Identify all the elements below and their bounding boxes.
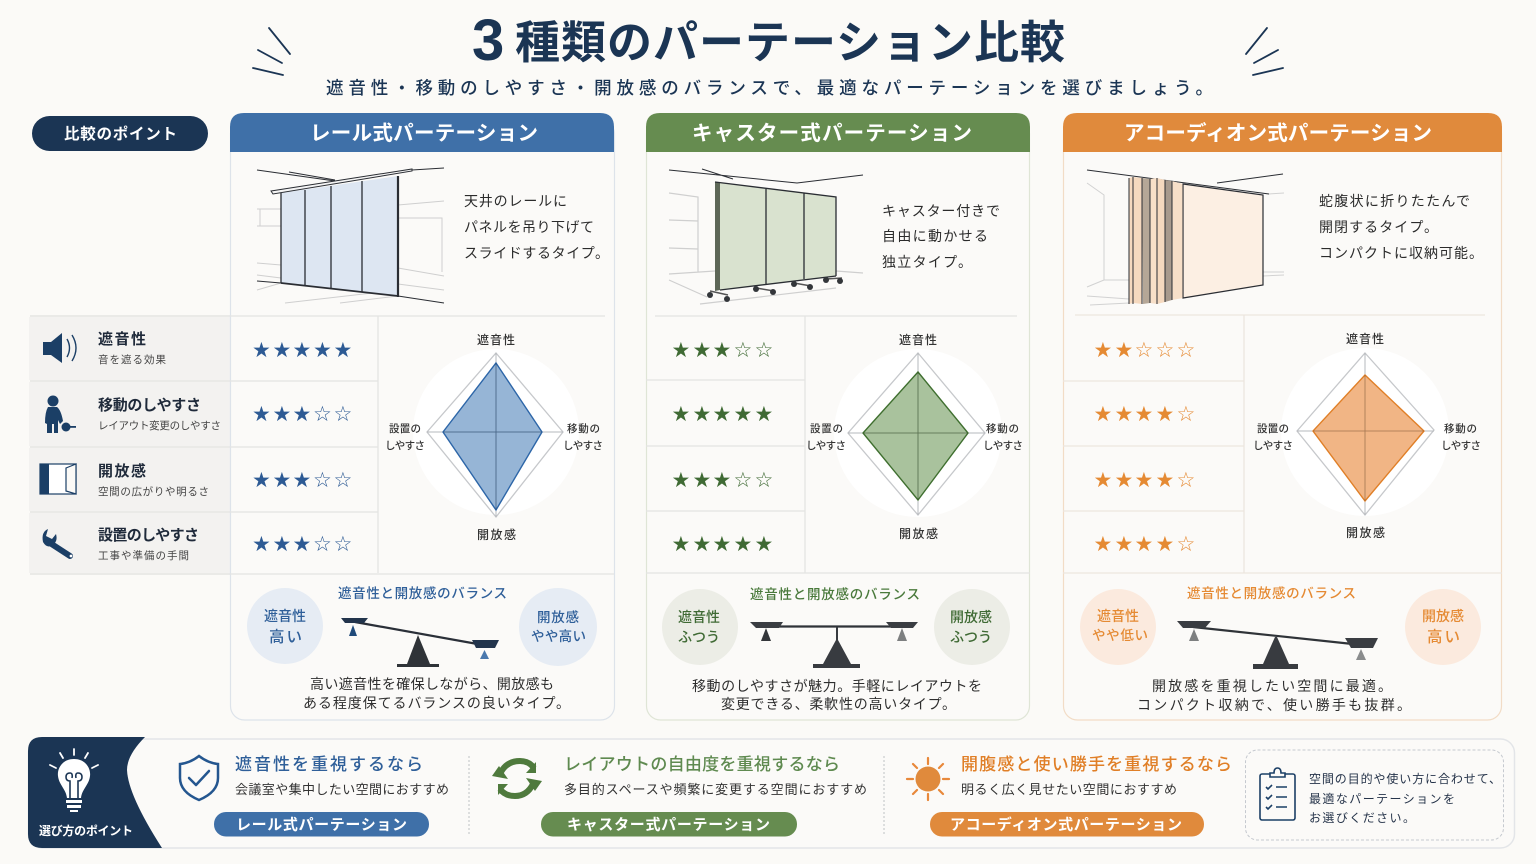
header: caster type (646, 113, 1030, 152)
text: accordion summary: コンパクト収納で、使い勝手も抜群。 (1137, 697, 1411, 713)
recommendation: openness and usability: 明るく広く見せたい空間におすすめ (961, 782, 1177, 797)
text: rail description (464, 193, 609, 261)
text: caster description: 自由に動かせる (882, 228, 988, 244)
icon: open door (40, 464, 76, 494)
stars: caster ratings: ★★★☆☆ (672, 468, 773, 492)
stars: caster ratings: ★★★★★ (672, 402, 773, 426)
radar chart: accordion: しやすさ (1253, 440, 1293, 452)
stars: accordion ratings: ★★☆☆☆ (1094, 338, 1195, 362)
radar chart: caster (806, 332, 1023, 541)
callout: final advice (1246, 750, 1504, 840)
icon: right burst lines (1246, 28, 1283, 75)
text: caster description (882, 203, 1000, 270)
label: sound insulation (98, 331, 166, 366)
label: ease of moving: 移動のしやすさ (98, 397, 201, 414)
radar chart: caster: 遮音性 (899, 332, 937, 347)
icon: light bulb (50, 749, 98, 812)
circle: sound insulation high: 高い (269, 628, 302, 646)
label: ease of installation: 工事や準備の手間 (98, 549, 189, 562)
recommendation: openness and usability: アコーディオン式パーテーション (950, 816, 1182, 834)
recommendation: sound insulation (214, 755, 449, 836)
heading: accordion balance: 遮音性と開放感のバランス (1187, 585, 1356, 601)
recommendation: openness and usability (930, 755, 1232, 836)
radar chart: rail: しやすさ (563, 440, 603, 452)
panel: selection tips (28, 737, 1514, 848)
icon: wrench (43, 529, 72, 557)
circle: openness normal (934, 589, 1010, 665)
badge: comparison points: 比較のポイント (64, 125, 177, 143)
radar chart: rail: 移動の (567, 422, 600, 435)
circle: sound insulation high: 遮音性 (264, 608, 306, 624)
text: rail description: パネルを吊り下げて (464, 219, 594, 235)
icon: recycle arrows (492, 761, 542, 796)
stars: accordion ratings: ★★★★☆ (1094, 468, 1195, 492)
icon: speaker (43, 333, 76, 363)
recommendation: openness and usability: 開腹感と使い勝手を重視するなら (961, 755, 1232, 774)
label: ease of installation (98, 527, 199, 562)
circle: openness normal: ふつう (950, 629, 992, 645)
heading: rail balance: 遮音性と開放感のバランス (338, 585, 507, 601)
recommendation: layout freedom: 多目的スペースや頻繁に変更する空間におすすめ (564, 782, 867, 797)
text: accordion summary (1137, 678, 1411, 713)
circle: openness fairly high: 開放感 (537, 609, 580, 625)
text: rail description: 天井のレールに (464, 193, 567, 209)
stars: accordion ratings: ★★★★☆ (1094, 532, 1195, 556)
text: caster description: キャスター付きで (882, 203, 1000, 219)
radar chart: rail: 開放感 (477, 527, 516, 542)
radar chart: accordion: 移動の (1444, 422, 1477, 435)
illustration: caster partition (669, 169, 863, 304)
radar chart: caster: 設置の (810, 423, 843, 435)
radar chart: accordion: しやすさ (1441, 440, 1481, 452)
icon: sun (907, 758, 949, 800)
recommendation: layout freedom: キャスター式パーテーション (567, 816, 770, 834)
heading: caster balance: 遮音性と開放感のバランス (750, 586, 920, 602)
label: ease of installation: 設置のしやすさ (98, 527, 199, 544)
text: rail description: スライドするタイプ。 (464, 245, 609, 261)
illustration: ceiling rail partition (257, 168, 444, 303)
text: caster summary (692, 678, 982, 712)
header: rail type (230, 113, 614, 152)
banner: selection points (28, 737, 162, 848)
callout: final advice: 最適なパーテーションを (1309, 792, 1455, 806)
icon: person moving (45, 396, 76, 433)
circle: openness fairly high (519, 588, 597, 666)
radar chart: accordion: 開放感 (1346, 525, 1385, 540)
circle: sound insulation fairly low: 遮音性 (1097, 608, 1139, 624)
label: ease of moving (98, 397, 221, 432)
recommendation: layout freedom (541, 755, 867, 836)
radar chart: caster: 移動の (986, 422, 1019, 435)
badge: comparison points (32, 116, 208, 151)
stars: caster ratings: ★★★★★ (672, 532, 773, 556)
panel: comparison criteria rows (29, 316, 230, 574)
icon: clipboard checklist (1260, 768, 1295, 820)
radar chart: caster: 開放感 (899, 526, 938, 541)
recommendation: sound insulation: 会議室や集中したい空間におすすめ (235, 782, 449, 797)
illustration: accordion partition (1087, 170, 1284, 305)
radar chart: caster: しやすさ (983, 440, 1023, 452)
circle: openness high: 開放感 (1422, 608, 1464, 624)
label: sound insulation: 音を遮る効果 (98, 353, 166, 366)
text: caster summary: 移動のしやすさが魅力。手軽にレイアウトを (692, 678, 982, 694)
text: accordion description: コンパクトに収納可能。 (1319, 245, 1483, 261)
text: accordion description: 開閉するタイプ。 (1319, 219, 1438, 235)
stars: rail ratings: ★★★★★ (252, 338, 352, 362)
text: rail summary (303, 676, 570, 711)
recommendation: layout freedom: レイアウトの自由度を重視するなら (564, 755, 840, 774)
radar chart: rail (385, 332, 603, 542)
radar chart: caster: しやすさ (806, 440, 846, 452)
icon: balanced seesaw (750, 622, 918, 668)
radar chart: accordion: 遮音性 (1346, 331, 1384, 346)
stars: caster ratings (672, 338, 773, 556)
radar chart: accordion (1253, 331, 1481, 540)
panel: accordion type (1063, 113, 1502, 720)
recommendation: sound insulation: 遮音性を重視するなら (235, 755, 423, 774)
stars: rail ratings: ★★★☆☆ (252, 402, 352, 426)
text: rail summary: 高い遮音性を確保しながら、開放感も (310, 676, 554, 692)
circle: sound insulation normal (662, 589, 738, 665)
label: openness (98, 462, 209, 498)
radar chart: rail: 遮音性 (477, 332, 515, 347)
label: openness: 空間の広がりや明るさ (98, 485, 209, 498)
header: accordion type: アコーディオン式パーテーション (1124, 121, 1432, 145)
circle: openness high: 高い (1427, 628, 1460, 646)
stars: caster ratings: ★★★☆☆ (672, 338, 773, 362)
label: ease of moving: レイアウト変更のしやすさ (98, 419, 221, 432)
icon: seesaw tilted right (341, 618, 499, 667)
icon: seesaw tilted toward openness (1177, 621, 1378, 669)
circle: sound insulation high (247, 588, 323, 664)
text: rail summary: ある程度保てるバランスの良いタイプ。 (303, 695, 570, 711)
stars: accordion ratings: ★★★★☆ (1094, 402, 1195, 426)
radar chart: rail: 設置の (389, 423, 421, 435)
header: caster type: キャスター式パーテーション (692, 122, 972, 145)
text: accordion description (1319, 193, 1483, 261)
banner: selection points: 選び方のポイント (39, 823, 133, 838)
subtitle: 遮音性・移動のしやすさ・開放感のバランスで、最適なパーテーションを選びましょう。 (326, 78, 1213, 98)
circle: openness high (1405, 589, 1481, 665)
radar chart: accordion: 設置の (1257, 423, 1289, 435)
stars: accordion ratings (1094, 338, 1195, 556)
header: rail type: レール式パーテーション (310, 122, 538, 145)
circle: sound insulation normal: ふつう (678, 629, 720, 645)
text: caster summary: 変更できる、柔軟性の高いタイプ。 (721, 696, 956, 712)
circle: openness fairly high: やや高い (531, 628, 586, 644)
title: 3 (472, 8, 504, 73)
panel: caster type (646, 113, 1030, 720)
icon: left burst lines (253, 28, 290, 75)
callout: final advice: 空間の目的や使い方に合わせて、 (1309, 771, 1501, 786)
stars: rail ratings (252, 338, 352, 556)
title: 種類のパーテーション比較 (515, 17, 1065, 68)
icon: shield check (180, 756, 218, 800)
stars: rail ratings: ★★★☆☆ (252, 532, 352, 556)
label: sound insulation: 遮音性 (98, 331, 146, 348)
recommendation: sound insulation: レール式パーテーション (236, 816, 407, 834)
text: accordion description: 蛇腹状に折りたたんで (1319, 193, 1470, 209)
circle: sound insulation fairly low (1080, 589, 1156, 665)
stars: rail ratings: ★★★☆☆ (252, 468, 352, 492)
text: caster description: 独立タイプ。 (882, 254, 972, 270)
panel: rail type (230, 113, 614, 720)
circle: openness normal: 開放感 (950, 609, 992, 625)
text: accordion summary: 開放感を重視したい空間に最適。 (1152, 678, 1392, 694)
callout: final advice: お選びください。 (1309, 811, 1415, 825)
circle: sound insulation fairly low: やや低い (1092, 628, 1148, 643)
label: openness: 開放感 (98, 462, 146, 480)
circle: sound insulation normal: 遮音性 (678, 609, 720, 625)
header: accordion type (1063, 113, 1502, 152)
radar chart: rail: しやすさ (385, 440, 425, 452)
